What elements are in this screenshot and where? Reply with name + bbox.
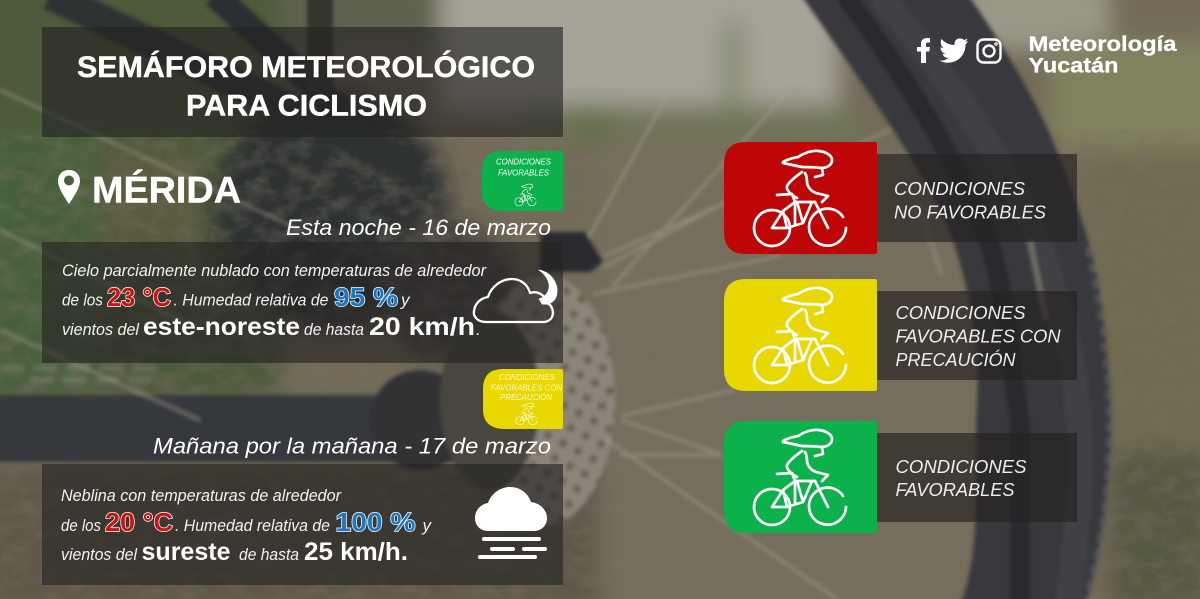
text: tonight forecast: 20 km/h	[369, 313, 475, 341]
text: tonight forecast: Cielo parcialmente nublado con temperaturas de alrededor	[62, 261, 487, 280]
logo: Meteorología Yucatán: Yucatán	[1028, 54, 1118, 78]
spokes	[0, 73, 890, 599]
legend: favorable	[724, 421, 1077, 533]
heading: title: PARA CICLISMO	[186, 90, 427, 122]
legend: favorable with caution	[724, 279, 1077, 391]
text: tomorrow forecast: sureste	[142, 538, 231, 566]
hub	[540, 232, 603, 272]
text: tomorrow forecast: Neblina con temperaturas de alrededor	[61, 486, 342, 505]
small badge: caution: PRECAUCIÓN	[500, 393, 552, 402]
small badge: favorable	[482, 151, 563, 211]
text: tomorrow forecast: 100 %	[336, 507, 416, 537]
mottled ground texture	[0, 130, 1200, 599]
legend: favorable: CONDICIONES	[896, 456, 1027, 477]
subheading: tomorrow morning: Mañana por la mañana - 17 de marzo	[153, 434, 551, 458]
logo: Meteorología Yucatán: Meteorología	[1028, 33, 1177, 56]
heading: title	[77, 50, 535, 122]
text: tomorrow forecast: vientos del	[61, 545, 138, 564]
small badge: caution: CONDICIONES	[499, 373, 556, 382]
text: tonight forecast: vientos del	[62, 320, 140, 339]
icon: cloud and moon	[474, 270, 557, 322]
text: tonight forecast: este-noreste	[143, 313, 300, 341]
text: tonight forecast	[62, 261, 487, 341]
small badge: favorable: CONDICIONES	[496, 158, 552, 166]
icon: cloud with fog	[475, 487, 547, 559]
text: tomorrow forecast: 20 °C	[105, 507, 173, 537]
heading: title: SEMÁFORO METEOROLÓGICO	[77, 50, 535, 84]
icon: facebook	[917, 38, 930, 63]
legend: favorable: FAVORABLES	[896, 479, 1015, 500]
subheading: tonight: Esta noche - 16 de marzo	[286, 215, 551, 240]
text: tomorrow forecast: y	[422, 516, 432, 535]
text: tonight forecast: . Humedad relativa de	[174, 290, 328, 310]
legend: not favorable: NO FAVORABLES	[894, 202, 1047, 222]
text: tomorrow forecast: 25 km/h.	[304, 538, 408, 566]
legend: favorable with caution: PRECAUCIÓN	[896, 349, 1016, 370]
legend: favorable with caution: FAVORABLES CON	[896, 326, 1061, 346]
legend: not favorable	[724, 142, 1077, 254]
text: tonight forecast: de hasta	[304, 320, 364, 339]
text: tonight forecast: y	[400, 290, 411, 310]
icon: twitter	[940, 38, 968, 63]
panel: tonight forecast	[42, 242, 563, 363]
text: tomorrow forecast: . Humedad relativa de	[175, 516, 330, 535]
heading: city: MÉRIDA	[92, 170, 241, 210]
text: tonight forecast: de los	[62, 290, 103, 310]
small badge: favorable: FAVORABLES	[498, 168, 550, 178]
panel: title	[42, 27, 563, 137]
small badge: caution: FAVORABLES CON	[491, 384, 562, 392]
text: tomorrow forecast	[61, 486, 432, 566]
logo: Meteorología Yucatán	[1028, 33, 1177, 78]
icon: location pin	[58, 170, 80, 204]
panel: tomorrow forecast	[42, 464, 563, 585]
legend: not favorable: CONDICIONES	[894, 178, 1026, 199]
disc rotor	[475, 275, 615, 525]
icon: instagram	[978, 40, 1000, 62]
text: tonight forecast: .	[476, 320, 481, 339]
text: tonight forecast: 23 °C	[107, 282, 171, 312]
text: tomorrow forecast: de los	[61, 516, 101, 535]
small badge: caution	[483, 369, 563, 429]
social icons	[917, 38, 1000, 63]
legend: favorable with caution: CONDICIONES	[896, 302, 1026, 323]
frame tube	[0, 395, 476, 462]
tire	[801, 0, 1111, 599]
text: tonight forecast: 95 %	[334, 282, 398, 312]
text: tomorrow forecast: de hasta	[239, 545, 299, 564]
